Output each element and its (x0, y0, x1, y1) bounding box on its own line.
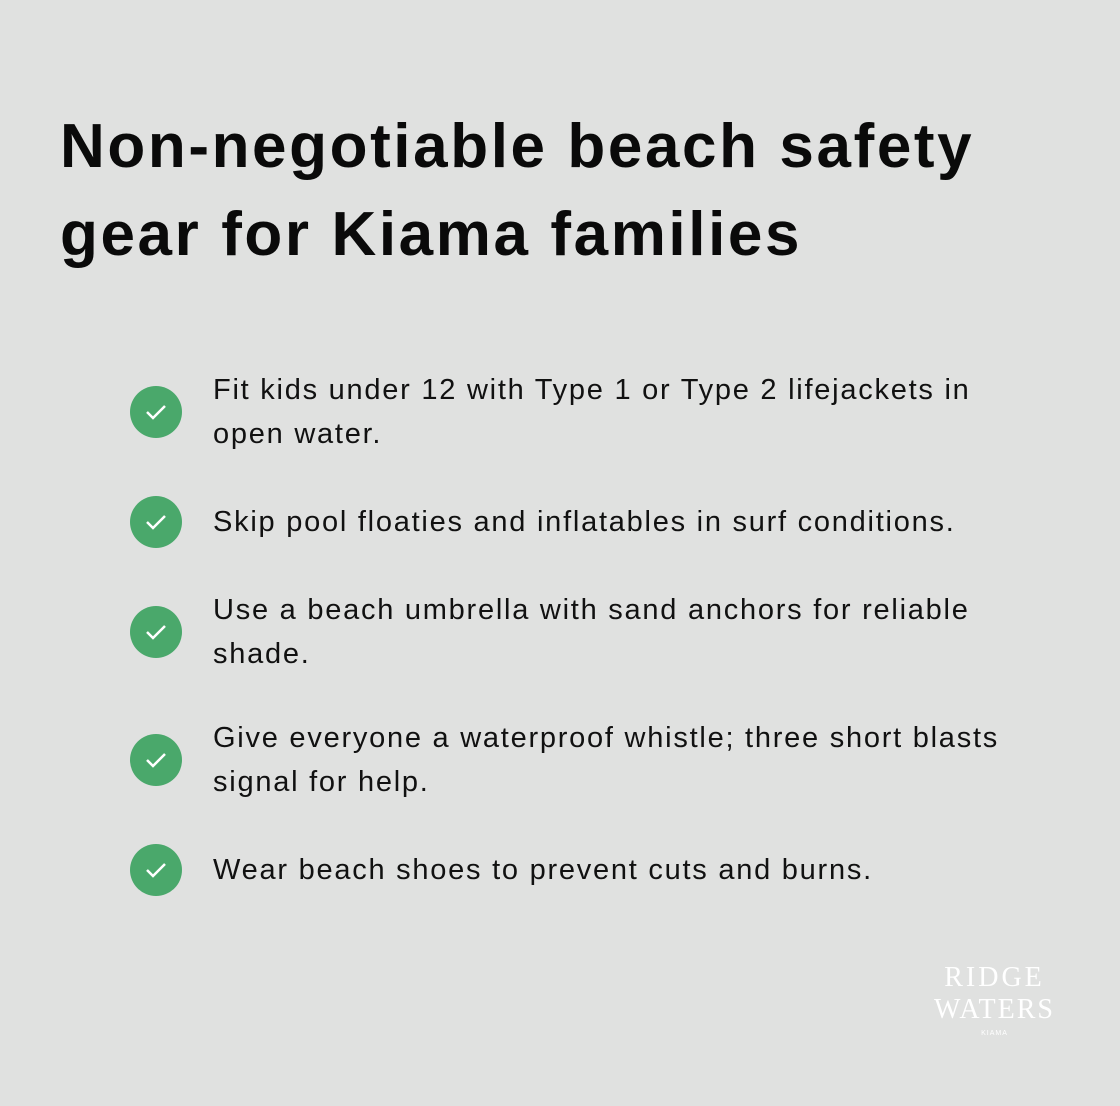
title: gear for Kiama families (60, 200, 802, 269)
icon: check (130, 606, 182, 658)
logo: RIDGE (944, 962, 1045, 993)
logo (934, 962, 1055, 1037)
text 4: signal for help. (213, 766, 430, 798)
icon: check (130, 386, 182, 438)
item 3 (130, 594, 970, 670)
logo: KIAMA (981, 1030, 1008, 1037)
icon: check (130, 734, 182, 786)
item 4 (130, 722, 999, 798)
title: Non-negotiable beach safety (60, 112, 974, 181)
text 1 (213, 374, 971, 450)
text 3 (213, 594, 970, 670)
item 1 (130, 374, 971, 450)
text 1: open water. (213, 418, 382, 450)
title (60, 112, 974, 269)
text 4 (213, 722, 999, 798)
item 2 (130, 496, 956, 548)
text 1: Fit kids under 12 with Type 1 or Type 2 lifejackets in (213, 374, 971, 406)
text 5: Wear beach shoes to prevent cuts and burns. (213, 854, 873, 886)
item 5 (130, 844, 873, 896)
icon: check (130, 844, 182, 896)
text 3: Use a beach umbrella with sand anchors for reliable (213, 594, 970, 626)
logo: WATERS (934, 994, 1055, 1025)
text 3: shade. (213, 638, 311, 670)
text 4: Give everyone a waterproof whistle; three short blasts (213, 722, 999, 754)
icon: check (130, 496, 182, 548)
text 2: Skip pool floaties and inflatables in surf conditions. (213, 506, 956, 538)
